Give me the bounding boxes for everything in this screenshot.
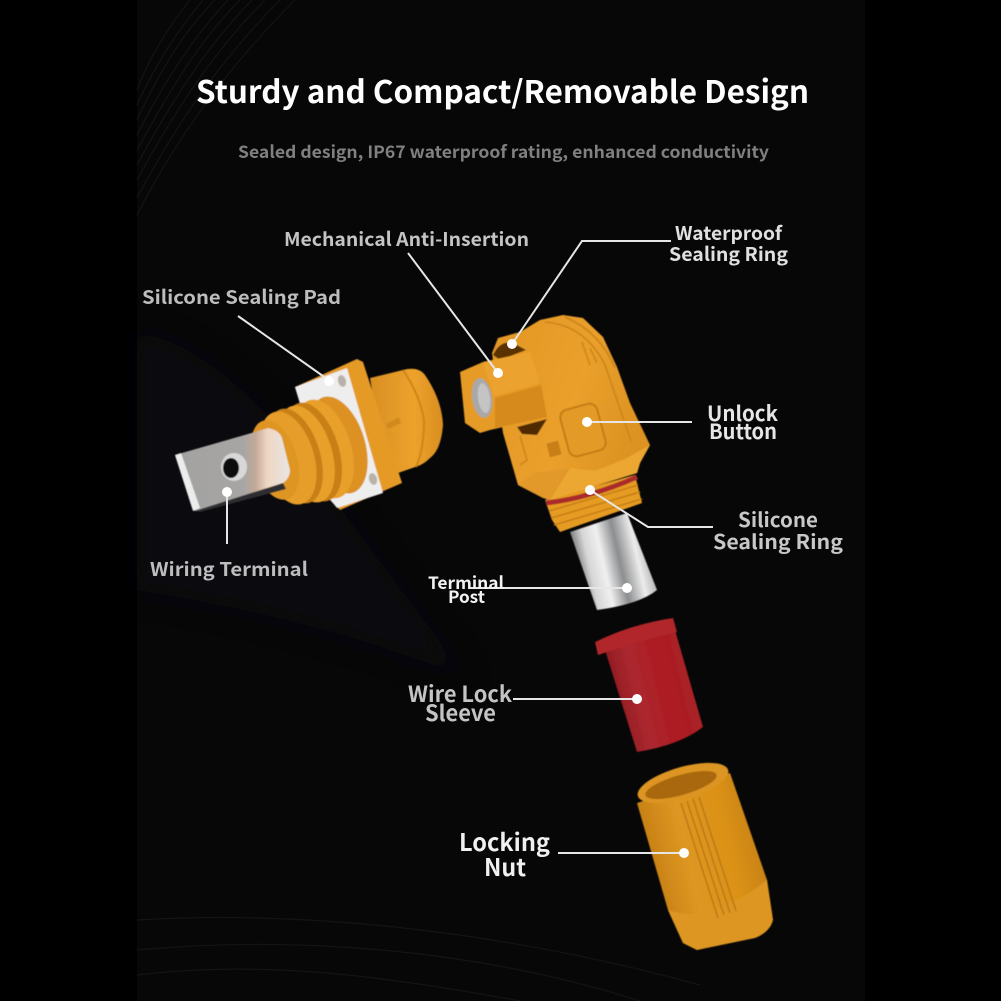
locking nut [633,755,773,950]
seal opening [493,342,526,360]
callout: Unlock Button: Unlock [707,398,778,428]
callout: Waterproof Sealing Ring: Sealing Ring [669,240,789,267]
threaded ribs [298,389,378,501]
latch window [546,441,562,457]
callout: Silicone Sealing Pad: Silicone Sealing Pad [142,283,341,310]
callout: Silicone Sealing Ring: Sealing Ring [713,526,843,555]
ridges [520,317,631,465]
callout: Unlock Button: Button [709,416,777,446]
silver terminal post [570,513,657,610]
callout: Wire Lock Sleeve: Wire Lock [408,677,513,709]
callout: Terminal Post: Post [448,583,485,608]
callout: Waterproof Sealing Ring [507,219,789,349]
callout: Waterproof Sealing Ring: Waterproof [675,219,783,246]
red sealing ring [546,477,637,503]
callout: Locking Nut: Locking [459,823,550,858]
left connector: receptacle [175,359,443,512]
right connector: right-angle plug [460,315,657,610]
front tube [460,352,547,433]
callout: Silicone Sealing Pad [142,283,341,386]
callout: Wire Lock Sleeve [408,677,642,728]
callout: Silicone Sealing Ring: Silicone [738,504,818,533]
callout: Wiring Terminal [150,487,308,582]
mounting flange [295,359,402,510]
subtitle: Sealed design, IP67 waterproof rating, enhanced conductivity [238,138,769,163]
callout: Terminal Post: Terminal [428,569,504,594]
unlock button [558,402,608,458]
callout: Terminal Post [428,569,632,608]
wire lock sleeve [595,618,703,752]
callout: Wiring Terminal: Wiring Terminal [150,555,308,582]
callout: Mechanical Anti-Insertion [284,225,529,378]
callout: Unlock Button [582,398,778,446]
lower facet [550,445,650,500]
background panel [137,0,865,1001]
title: Sturdy and Compact/Removable Design [196,67,809,112]
callout: Mechanical Anti-Insertion: Mechanical Anti-Insertion [284,225,529,252]
callout: Locking Nut: Nut [484,848,526,883]
rear cylinder [370,369,443,473]
callout: Locking Nut [459,823,689,883]
terminal blade [175,428,290,511]
main body [492,315,650,500]
callout: Wire Lock Sleeve: Sleeve [425,696,496,728]
threaded collar [545,475,642,532]
callout: Silicone Sealing Ring [585,485,843,555]
